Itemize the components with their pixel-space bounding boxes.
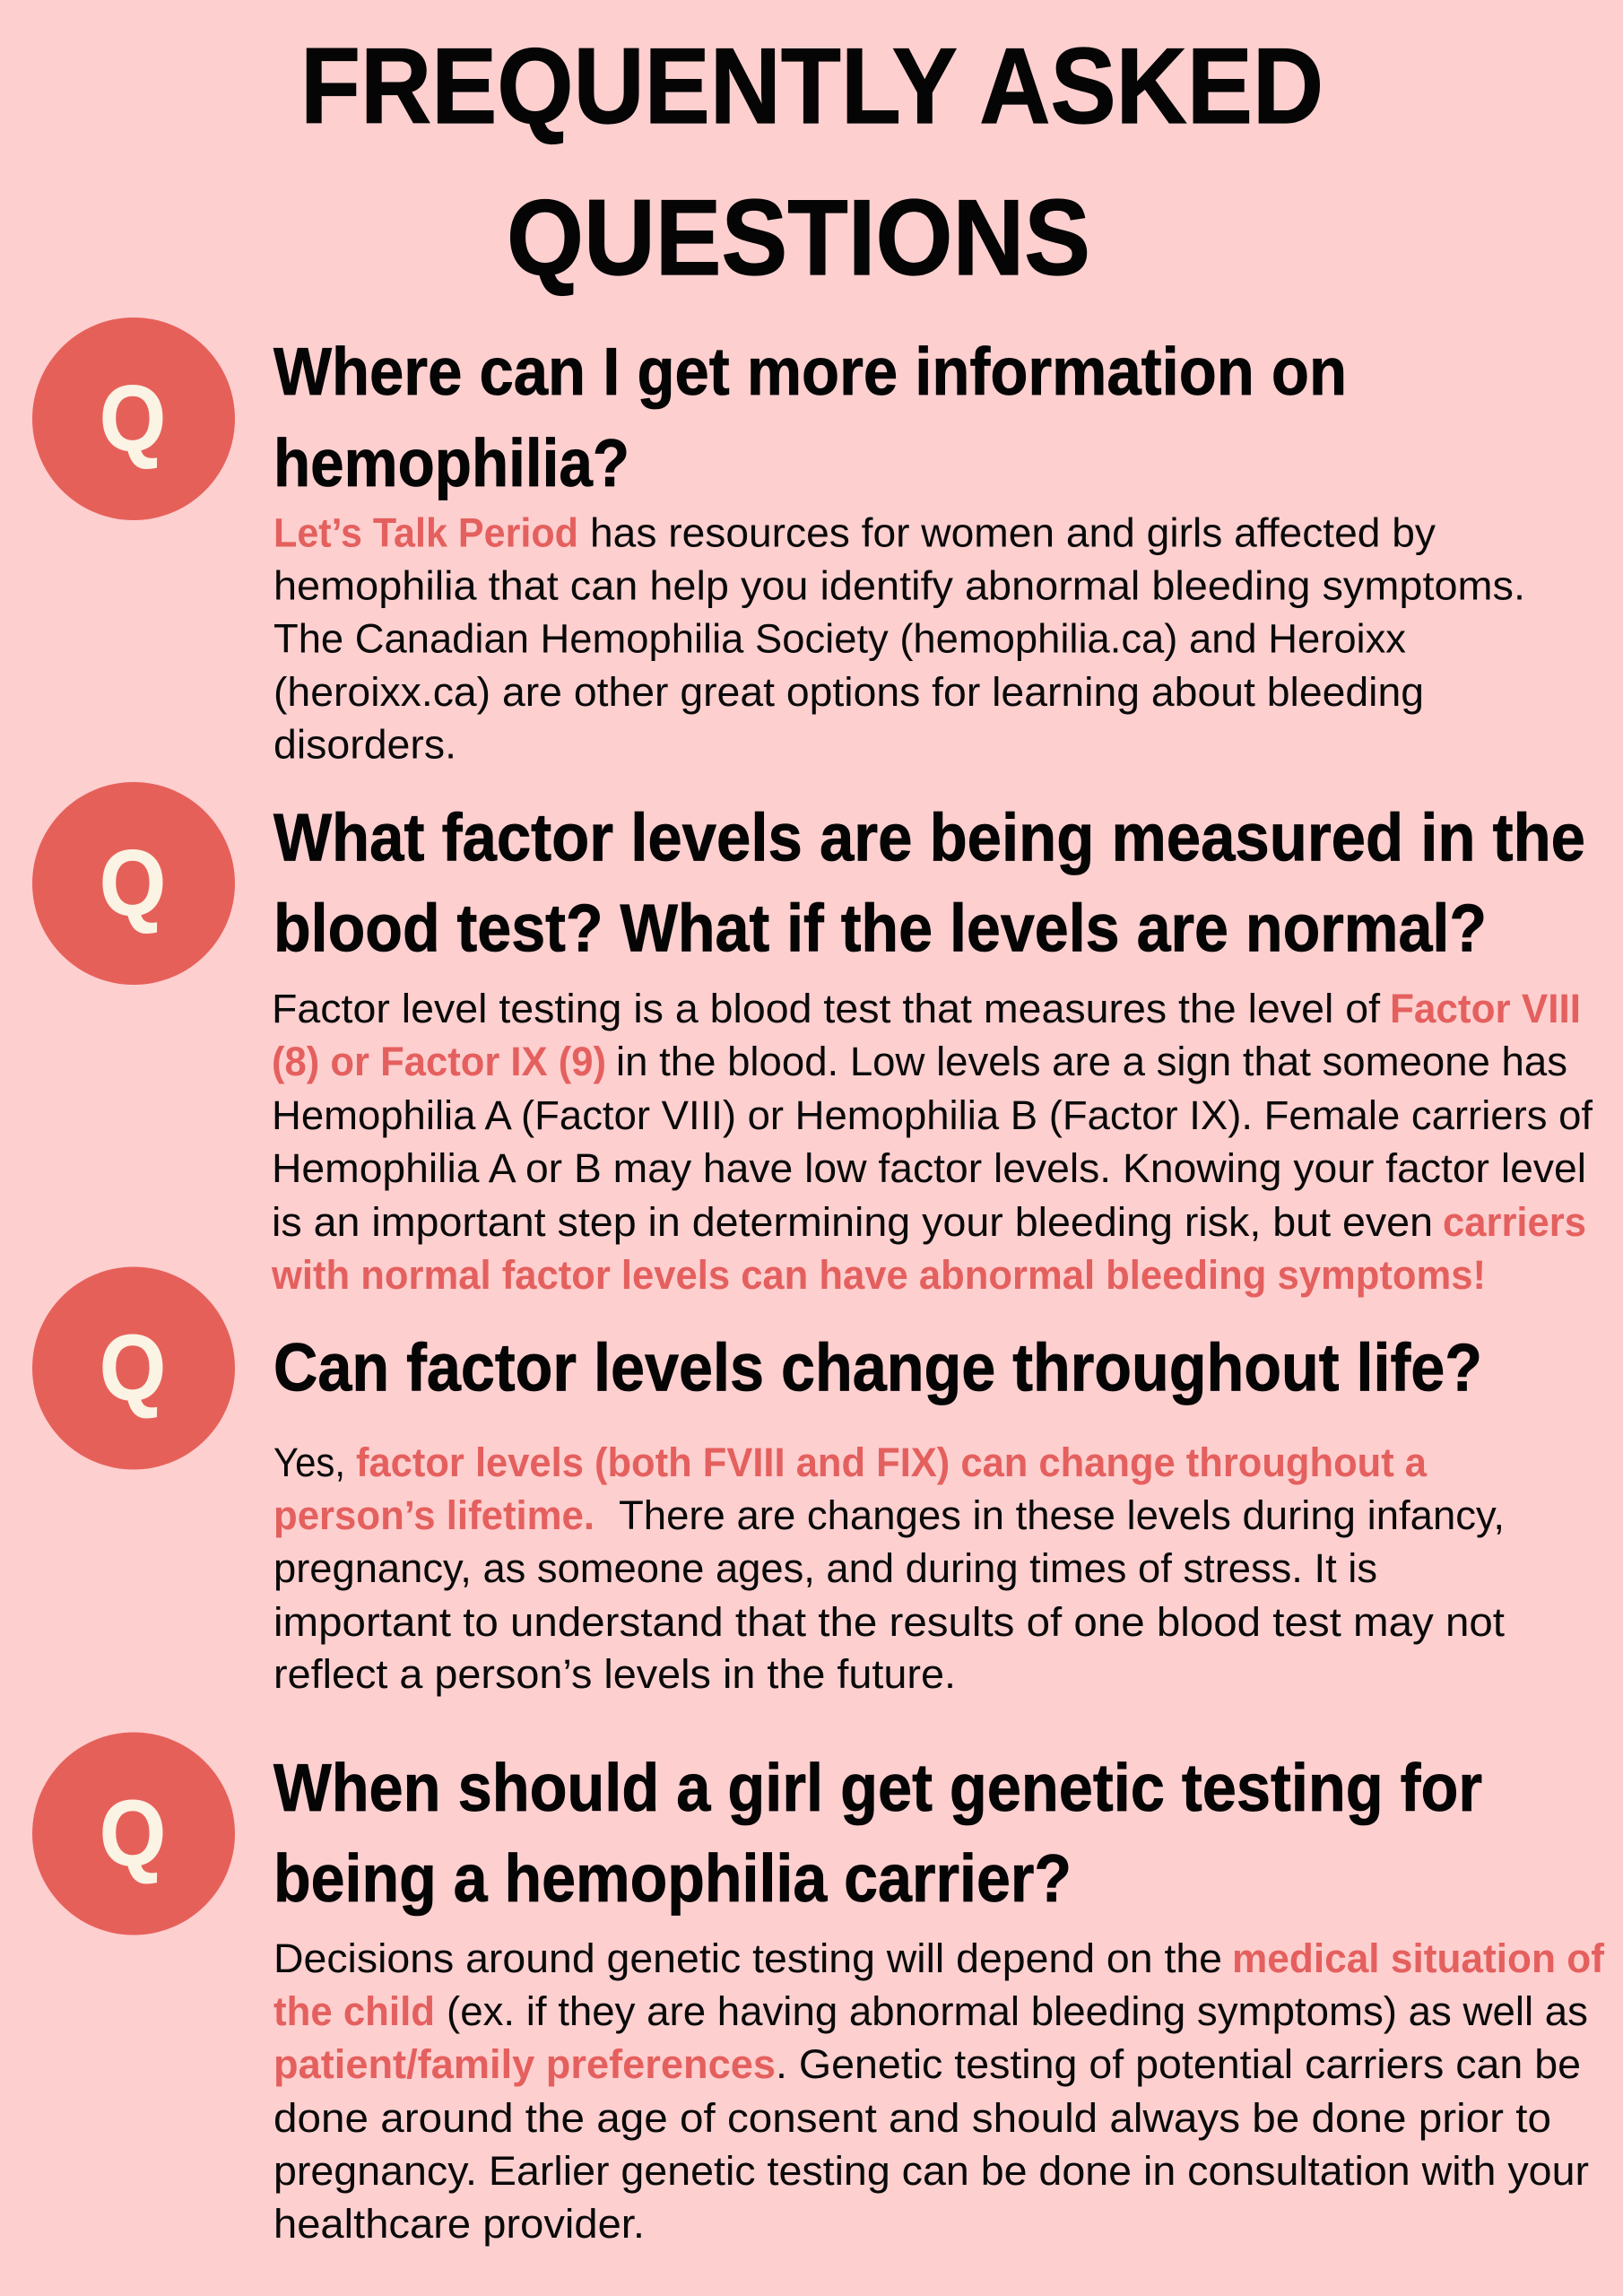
title: FREQUENTLY ASKED xyxy=(300,26,1324,146)
text block: answer 3: important to understand that the results of one blood test may not xyxy=(273,1599,1506,1645)
text block: answer 3: Yes, xyxy=(273,1439,345,1485)
text block: answer 3: person’s lifetime. xyxy=(273,1492,595,1538)
text block: answer 4: . Genetic testing of potential carriers can be xyxy=(776,2041,1581,2087)
text block: answer 4: pregnancy. Earlier genetic testing can be done in consultation with your xyxy=(273,2148,1589,2194)
text block: answer 1: (heroixx.ca) are other great options for learning about bleeding xyxy=(273,669,1424,715)
text block: answer 3: pregnancy, as someone ages, and during times of stress. It is xyxy=(273,1545,1377,1591)
panel: question 2 xyxy=(32,782,1593,1298)
text block: answer 2: Hemophilia A or B may have low factor levels. Knowing your factor level xyxy=(272,1145,1586,1191)
heading: question 2 xyxy=(273,800,1585,965)
text block: answer 3: There are changes in these levels during infancy, xyxy=(619,1492,1505,1538)
text block: answer 1 xyxy=(273,509,1525,768)
text block: answer 2: with normal factor levels can have abnormal bleeding symptoms! xyxy=(271,1252,1486,1298)
text block: answer 4: patient/family preferences xyxy=(273,2041,776,2087)
panel: question 3 xyxy=(32,1266,1506,1697)
text block: answer 1: hemophilia that can help you identify abnormal bleeding symptoms. xyxy=(273,563,1525,608)
panel: question 1 xyxy=(32,317,1525,768)
text block: answer 4: healthcare provider. xyxy=(273,2201,645,2247)
heading: question 4 xyxy=(273,1750,1482,1916)
text block: answer 4: Decisions around genetic testing will depend on the xyxy=(273,1935,1222,1981)
heading: question 3: Can factor levels change throughout life? xyxy=(273,1329,1482,1405)
text block: answer 4: medical situation of xyxy=(1232,1935,1605,1981)
text block: answer 1: The Canadian Hemophilia Society (hemophilia.ca) and Heroixx xyxy=(273,615,1406,662)
text block: answer 2 xyxy=(271,986,1593,1298)
heading: question 1: Where can I get more information on xyxy=(273,334,1347,409)
icon: Q circle 1: Q xyxy=(100,367,166,471)
text block: answer 1: has resources for women and girls affected by xyxy=(590,509,1436,556)
icon: Q circle 4: Q xyxy=(100,1781,166,1885)
heading: question 4: being a hemophilia carrier? xyxy=(273,1840,1072,1916)
icon: Q circle 2 xyxy=(32,782,235,985)
text block: answer 2: is an important step in determining your bleeding risk, but even xyxy=(272,1199,1433,1245)
text block: answer 2: Hemophilia A (Factor VIII) or Hemophilia B (Factor IX). Female carriers of xyxy=(272,1092,1593,1138)
text block: answer 2: in the blood. Low levels are a sign that someone has xyxy=(616,1039,1567,1084)
text block: answer 3 xyxy=(273,1439,1506,1697)
text block: answer 2: (8) or Factor IX (9) xyxy=(272,1039,606,1084)
panel: question 4 xyxy=(32,1733,1605,2247)
text block: answer 4: done around the age of consent and should always be done prior to xyxy=(273,2095,1551,2141)
heading: question 1 xyxy=(273,334,1347,500)
heading: question 2: blood test? What if the levels are normal? xyxy=(273,890,1487,965)
icon: Q circle 1 xyxy=(32,317,235,520)
text block: answer 1: Let’s Talk Period xyxy=(273,509,578,556)
heading: question 1: hemophilia? xyxy=(273,425,629,500)
heading: question 4: When should a girl get genetic testing for xyxy=(273,1750,1482,1825)
title xyxy=(300,26,1324,298)
text block: answer 4: the child xyxy=(273,1988,435,2034)
title: QUESTIONS xyxy=(507,178,1090,298)
text block: answer 3: factor levels (both FVIII and FIX) can change throughout a xyxy=(356,1439,1428,1485)
icon: Q circle 4 xyxy=(32,1733,235,1935)
icon: Q circle 3: Q xyxy=(100,1317,166,1421)
text block: answer 4 xyxy=(273,1935,1605,2247)
icon: Q circle 3 xyxy=(32,1266,235,1469)
text block: answer 1: disorders. xyxy=(273,721,456,768)
text block: answer 2: carriers xyxy=(1443,1199,1586,1245)
text block: answer 4: (ex. if they are having abnormal bleeding symptoms) as well as xyxy=(447,1988,1588,2034)
icon: Q circle 2: Q xyxy=(100,831,166,935)
text block: answer 2: Factor level testing is a blood test that measures the level of xyxy=(272,986,1381,1031)
text block: answer 2: Factor VIII xyxy=(1390,986,1581,1031)
text block: answer 3: reflect a person’s levels in the future. xyxy=(273,1651,956,1697)
